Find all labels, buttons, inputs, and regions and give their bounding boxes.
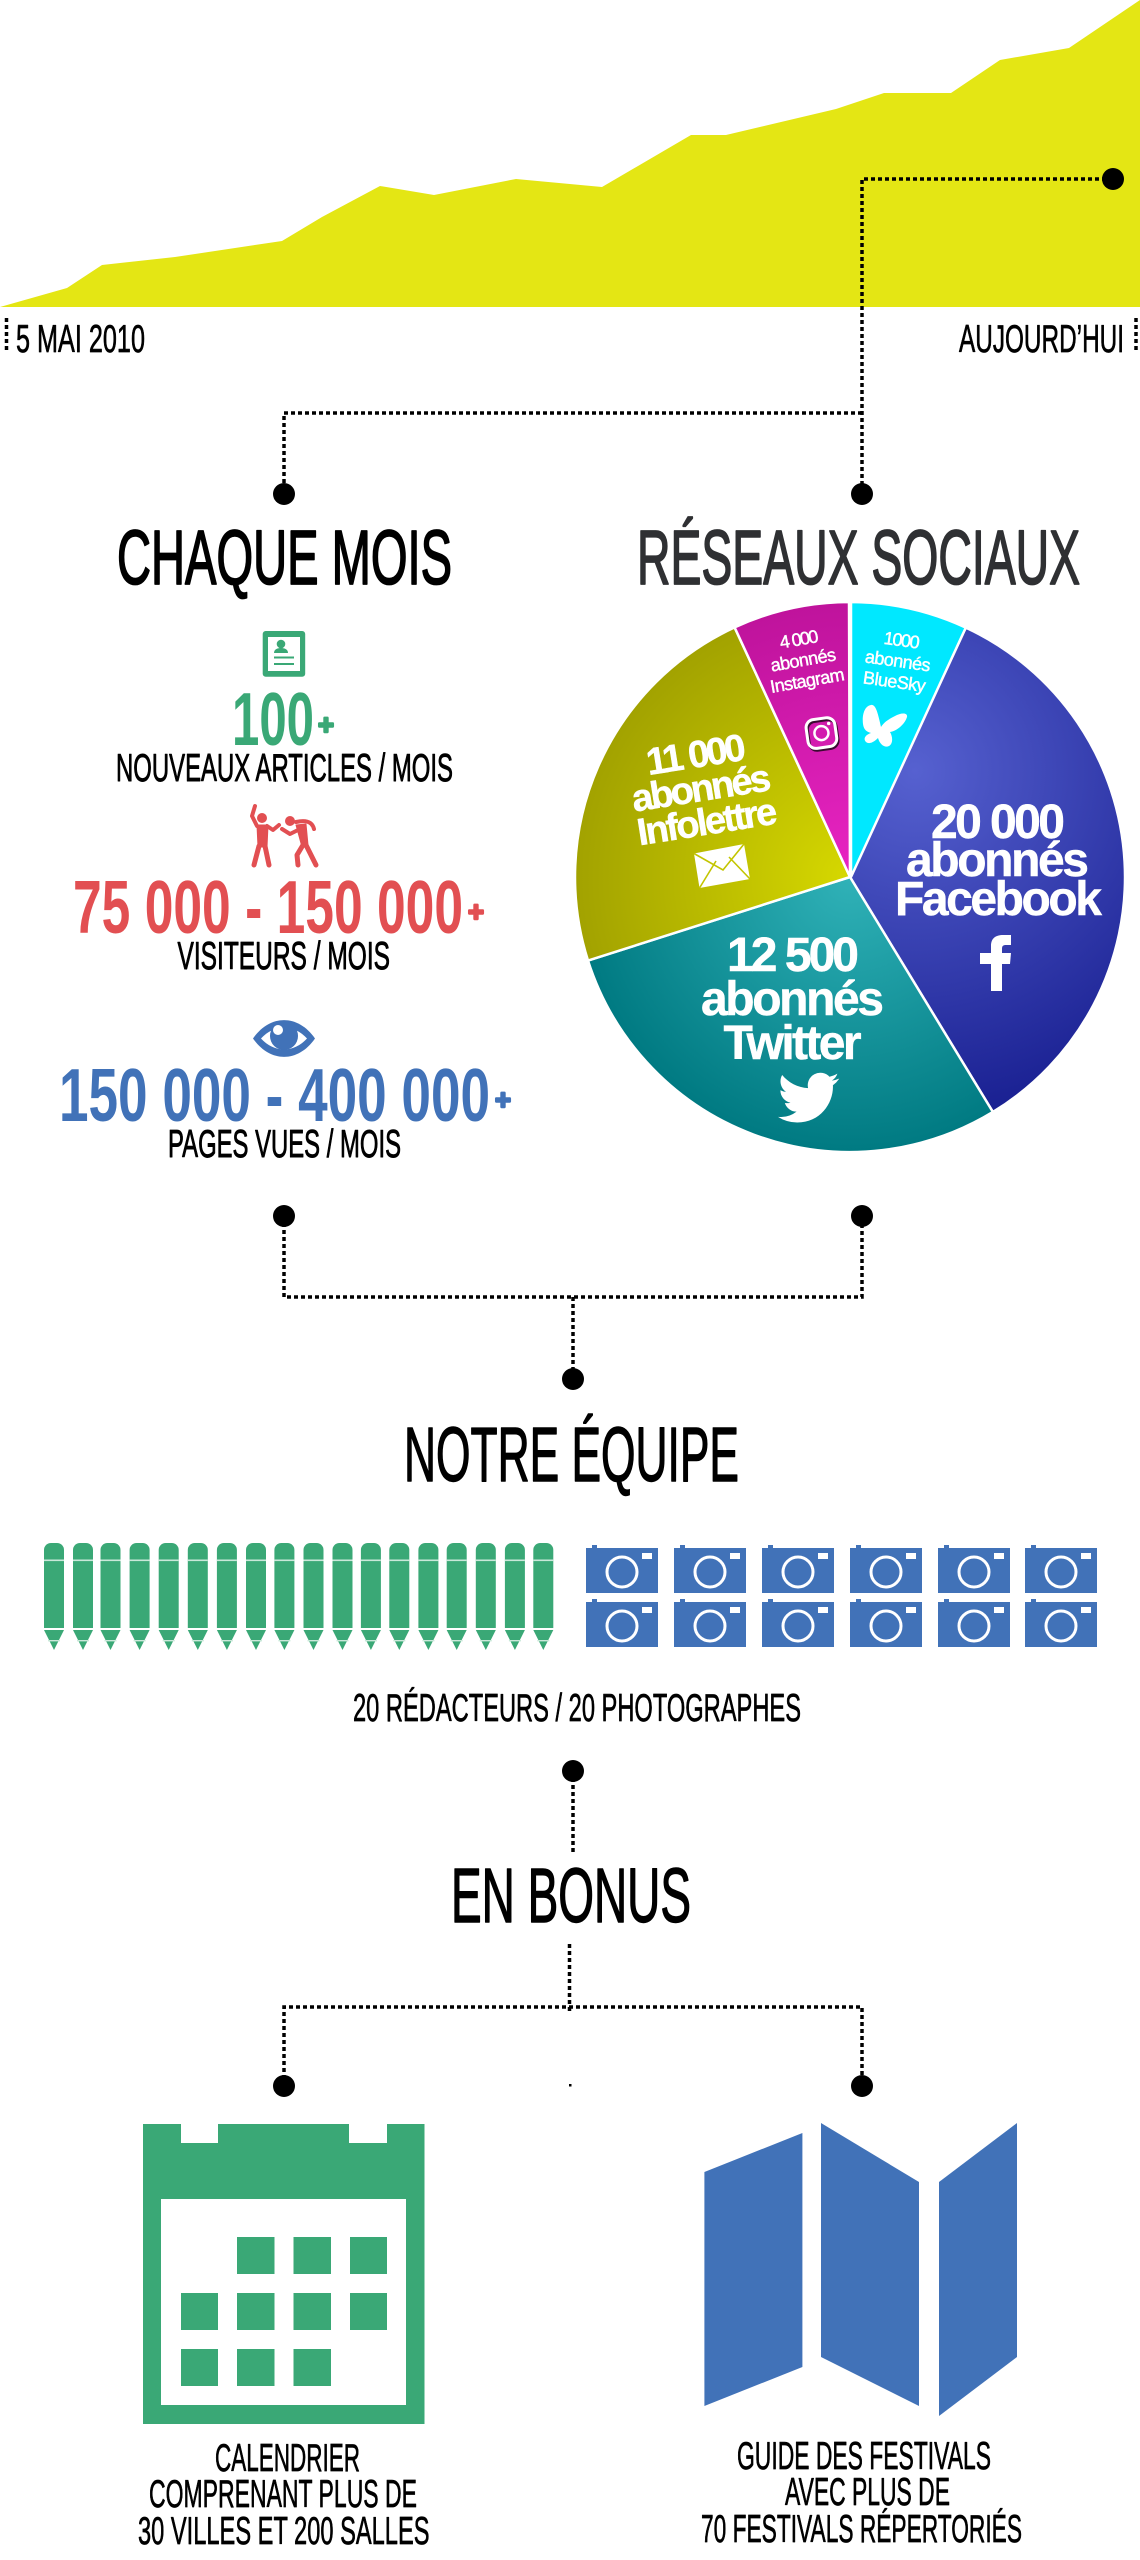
label: instagram: 4 000 xyxy=(778,626,820,653)
heading: chaque mois: CHAQUE MOIS xyxy=(117,515,452,601)
axis label: start date xyxy=(6,318,145,361)
text: calendar caption: CALENDRIER xyxy=(215,2437,360,2480)
number: 150 000 - 400 000+: + xyxy=(495,1084,511,1115)
label: bluesky: BlueSky xyxy=(862,667,927,696)
heading: en bonus: EN BONUS xyxy=(451,1853,691,1939)
area chart: growth since 2010 xyxy=(0,0,1140,307)
icon: facebook xyxy=(980,935,1011,991)
label: pages vues: PAGES VUES / MOIS xyxy=(168,1123,401,1166)
label: facebook: abonnés xyxy=(906,834,1089,887)
label: twitter: Twitter xyxy=(724,1017,862,1070)
label: team: 20 RÉDACTEURS / 20 PHOTOGRAPHES xyxy=(353,1687,801,1730)
label: infolettre: abonnés xyxy=(629,757,774,821)
text: guide caption xyxy=(701,2435,1022,2551)
slice: bluesky xyxy=(851,602,966,877)
heading: notre équipe: NOTRE ÉQUIPE xyxy=(404,1412,739,1498)
label: infolettre: Infolettre xyxy=(634,791,780,854)
slice: infolettre xyxy=(575,627,850,961)
icon: envelope xyxy=(694,844,750,888)
icon: article xyxy=(263,631,305,677)
label: facebook: 20 000 xyxy=(931,796,1065,849)
stat: page views xyxy=(59,1020,511,1166)
icons: pencils (writers) xyxy=(44,1543,553,1650)
connector: bonus to items xyxy=(273,1944,873,2097)
label: visiteurs: VISITEURS / MOIS xyxy=(178,935,390,978)
icon: people xyxy=(252,806,316,865)
text: calendar caption: COMPRENANT PLUS DE xyxy=(149,2473,417,2516)
icons: cameras (photographers) xyxy=(586,1545,1097,1647)
connector: to team xyxy=(273,1205,873,1390)
number: 100+: 100 xyxy=(232,677,314,761)
number: 150 000 - 400 000+: 150 000 - 400 000 xyxy=(59,1053,490,1137)
label: infolettre: 11 000 xyxy=(643,727,749,784)
label: twitter: 12 500 xyxy=(727,929,859,982)
label: twitter xyxy=(701,929,884,1070)
label: facebook: Facebook xyxy=(895,873,1102,926)
label: bluesky xyxy=(861,626,935,696)
pie chart: social networks xyxy=(575,602,1125,1152)
text: calendar caption xyxy=(138,2437,430,2553)
label: bluesky: 1000 xyxy=(883,628,921,653)
number: 75 000 - 150 000+: 75 000 - 150 000 xyxy=(73,865,463,949)
label: facebook xyxy=(895,796,1102,926)
text: guide caption: AVEC PLUS DE xyxy=(785,2471,950,2514)
stat: new articles xyxy=(116,631,453,790)
number: 75 000 - 150 000+: + xyxy=(468,896,484,927)
label: instagram xyxy=(761,623,846,697)
slice: facebook xyxy=(850,628,1125,1112)
text: calendar caption: 30 VILLES ET 200 SALLES xyxy=(138,2510,430,2553)
connector: team to bonus xyxy=(562,1760,584,1853)
label: instagram: abonnés xyxy=(769,644,837,676)
connector: chart to top sections xyxy=(273,168,1124,505)
icon: bluesky butterfly xyxy=(863,705,907,747)
label: twitter: abonnés xyxy=(701,973,884,1026)
label: infolettre xyxy=(624,724,780,854)
label: bluesky: abonnés xyxy=(864,646,932,675)
icon: instagram xyxy=(805,717,839,751)
icon: twitter bird xyxy=(778,1073,839,1122)
axis label: start date: 5 MAI 2010 xyxy=(16,318,145,361)
number: 100+: + xyxy=(318,709,334,740)
slice: instagram xyxy=(735,602,850,877)
stat: visitors xyxy=(73,806,484,978)
label: instagram: Instagram xyxy=(769,664,846,697)
label: nouveaux articles: NOUVEAUX ARTICLES / MOIS xyxy=(116,747,453,790)
icon: folded map xyxy=(704,2123,1017,2416)
slice: twitter xyxy=(588,877,993,1152)
icon: eye xyxy=(253,1020,315,1057)
icon: calendar xyxy=(143,2124,424,2424)
